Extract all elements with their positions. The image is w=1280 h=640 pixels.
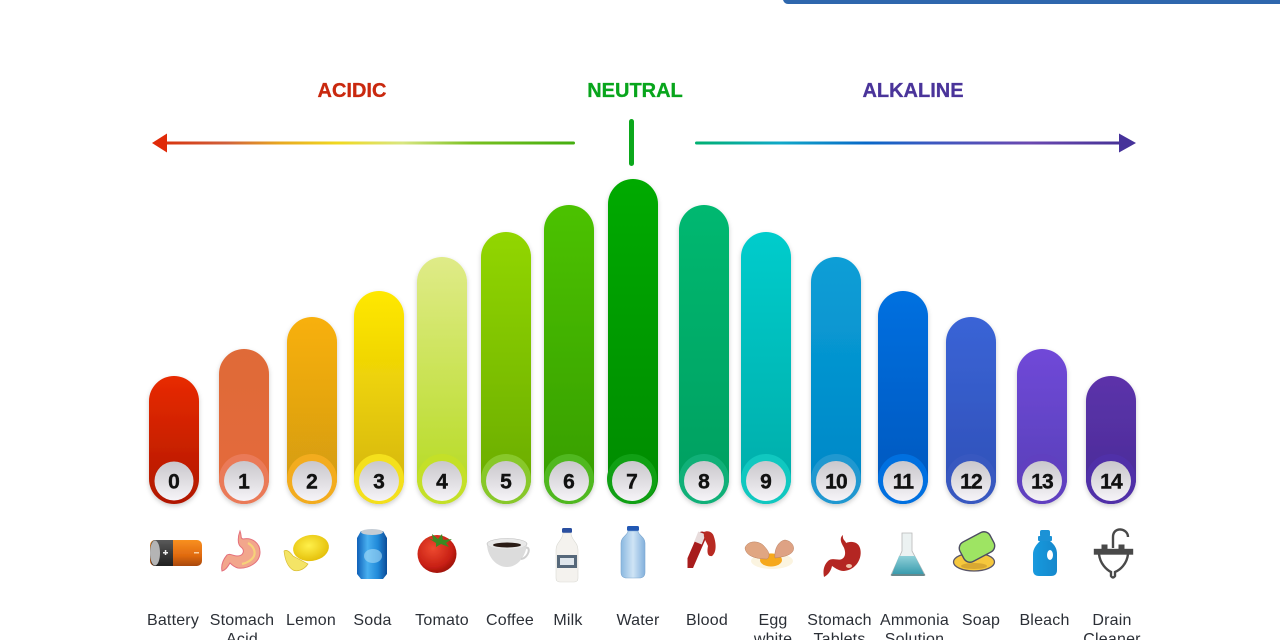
- number 3: 3: [373, 470, 385, 494]
- number 8: 8: [698, 470, 710, 494]
- bar: pH 0: [149, 376, 199, 504]
- number 14: 14: [1100, 470, 1123, 494]
- number 0: 0: [168, 470, 180, 494]
- bar: pH 2: [287, 317, 337, 504]
- label: Stomach Acid: Stomach: [210, 612, 274, 629]
- bar: pH 11: [878, 291, 928, 504]
- number 1: 1: [238, 470, 250, 494]
- neutral tick mark: [629, 119, 634, 166]
- bar: pH 8: [679, 205, 729, 504]
- label: Water: Water: [616, 612, 660, 629]
- arrow: alkaline direction: [695, 134, 1136, 152]
- label: Milk: Milk: [553, 612, 583, 629]
- bar: pH 13: [1017, 349, 1067, 504]
- label: Tomato: Tomato: [415, 612, 469, 629]
- label: Drain Cleaner: Drain: [1092, 612, 1132, 629]
- icon: bleach bottle: [1033, 530, 1057, 576]
- icon: flask: [891, 533, 925, 576]
- bar: pH 3: [354, 291, 404, 504]
- icon: egg: [745, 540, 794, 569]
- label: Ammonia Solution: Ammonia: [880, 612, 949, 629]
- icon: stomach: [222, 531, 260, 571]
- heading: neutral: NEUTRAL: [587, 80, 683, 102]
- label: Stomach Tablets: Stomach: [807, 612, 872, 629]
- bar: pH 1: [219, 349, 269, 504]
- icon: soda can: [357, 529, 387, 579]
- bar: pH 10: [811, 257, 861, 504]
- number 10: 10: [825, 470, 847, 494]
- icon: tomato: [418, 534, 456, 573]
- label: Soap: Soap: [962, 612, 1000, 629]
- number 2: 2: [306, 470, 318, 494]
- bar: pH 14: [1086, 376, 1136, 504]
- icon: blood test tube: [689, 531, 716, 566]
- icon: milk bottle: [556, 528, 578, 582]
- bar: pH 9: [741, 232, 791, 504]
- icon: battery: [150, 540, 202, 566]
- number 5: 5: [500, 470, 512, 494]
- heading: acidic: ACIDIC: [318, 80, 386, 102]
- number 4: 4: [436, 470, 448, 494]
- label: Blood: Blood: [686, 612, 728, 629]
- icon: water bottle: [621, 526, 645, 578]
- heading: alkaline: ALKALINE: [862, 80, 964, 102]
- label: Soda: Soda: [353, 612, 392, 629]
- number 7: 7: [626, 470, 638, 494]
- number 6: 6: [563, 470, 575, 494]
- bar: pH 12: [946, 317, 996, 504]
- icon: drain sink: [1095, 529, 1132, 578]
- label: Egg white: Egg: [758, 612, 788, 629]
- icon: lemon: [284, 533, 331, 571]
- icon: coffee cup: [487, 538, 529, 567]
- icon: stomach tablets: [823, 535, 861, 577]
- bar: pH 4: [417, 257, 467, 504]
- label: Lemon: Lemon: [286, 612, 336, 629]
- number 13: 13: [1031, 470, 1053, 494]
- label: Bleach: Bleach: [1019, 612, 1070, 629]
- icon: soap: [954, 529, 997, 571]
- number 9: 9: [760, 470, 772, 494]
- bar: pH 6: [544, 205, 594, 504]
- bar: pH 5: [481, 232, 531, 504]
- bar: pH 7: [607, 179, 658, 504]
- label: Battery: Battery: [147, 612, 199, 629]
- label: Coffee: Coffee: [486, 612, 534, 629]
- number 12: 12: [960, 470, 982, 494]
- number 11: 11: [893, 470, 914, 494]
- top accent bar: [783, 0, 1280, 4]
- arrow: acidic direction: [152, 134, 575, 152]
